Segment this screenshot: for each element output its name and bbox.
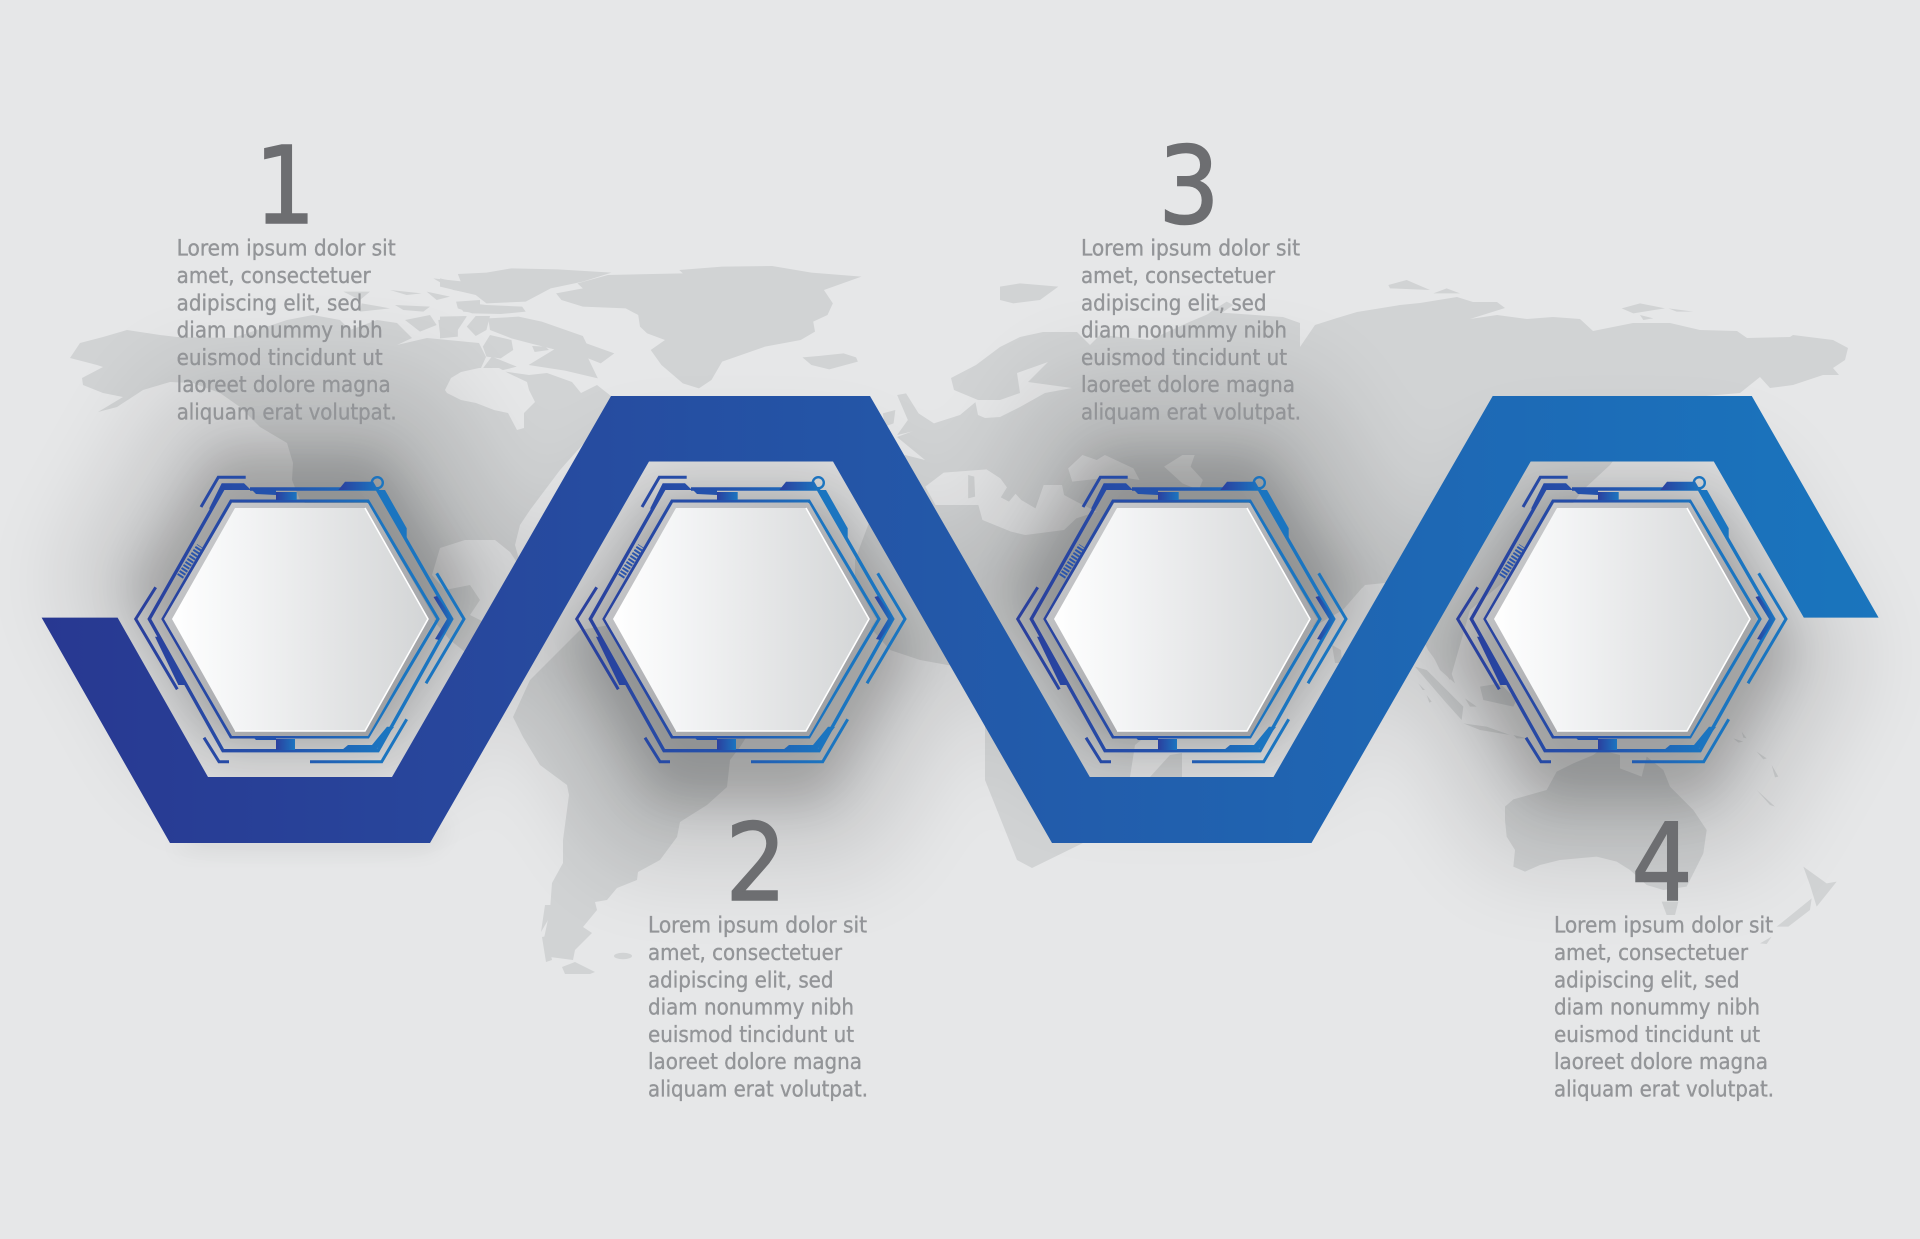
number 4: 4 — [1631, 802, 1693, 926]
step 3 text — [1081, 125, 1301, 426]
body text 4: amet, consectetuer — [1554, 941, 1749, 966]
body text 3: euismod tincidunt ut — [1081, 346, 1287, 371]
body text 4: Lorem ipsum dolor sit — [1554, 914, 1773, 939]
white hexagon 3 — [1046, 503, 1317, 736]
number 2: 2 — [725, 802, 787, 926]
circuit frame 1 — [136, 477, 464, 762]
body text 3 — [1081, 237, 1301, 426]
body text 1: aliquam erat volutpat. — [177, 400, 397, 426]
step 4 text — [1554, 802, 1774, 1102]
map: polar islands — [1000, 280, 1460, 325]
body text 1: euismod tincidunt ut — [177, 346, 383, 371]
body text 1: Lorem ipsum dolor sit — [177, 237, 396, 262]
body text 1: adipiscing elit, sed — [177, 291, 362, 316]
body text 4: adipiscing elit, sed — [1554, 968, 1740, 993]
body text 2: laoreet dolore magna — [648, 1050, 862, 1075]
body text 4 — [1554, 914, 1774, 1102]
body text 1: laoreet dolore magna — [177, 373, 391, 398]
body text 4: euismod tincidunt ut — [1554, 1023, 1760, 1048]
map: south america — [513, 620, 770, 960]
white hexagon 2 — [605, 503, 876, 736]
ribbon soft shadow — [170, 822, 452, 850]
number 3: 3 — [1158, 125, 1220, 249]
hexagon soft shadows — [60, 375, 1862, 865]
body text 1: diam nonummy nibh — [177, 319, 383, 344]
map: north america — [70, 315, 611, 680]
hexagon 2 — [577, 477, 905, 762]
body text 3: diam nonummy nibh — [1081, 319, 1287, 344]
number 1: 1 — [254, 125, 316, 249]
zigzag ribbon — [42, 396, 1879, 843]
body text 1: amet, consectetuer — [177, 264, 372, 289]
map: eurasia and africa — [855, 297, 1848, 868]
step 2 text — [648, 802, 868, 1102]
body text 1 — [177, 237, 397, 426]
world map — [70, 266, 1848, 974]
circuit frame 4 — [1458, 477, 1786, 762]
white hexagon 1 — [164, 503, 435, 736]
step 1 text — [177, 125, 397, 426]
body text 3: amet, consectetuer — [1081, 264, 1276, 289]
body text 3: laoreet dolore magna — [1081, 373, 1295, 398]
body text 4: aliquam erat volutpat. — [1554, 1078, 1774, 1102]
body text 2: euismod tincidunt ut — [648, 1023, 854, 1048]
map: greenland and iceland — [556, 266, 936, 435]
hexagon 4 — [1458, 477, 1786, 762]
body text 2: diam nonummy nibh — [648, 996, 854, 1021]
body text 2: aliquam erat volutpat. — [648, 1078, 868, 1102]
body text 4: diam nonummy nibh — [1554, 996, 1760, 1021]
body text 2: Lorem ipsum dolor sit — [648, 914, 867, 939]
body text 2: amet, consectetuer — [648, 941, 843, 966]
body text 2 — [648, 914, 868, 1102]
map: australia — [1415, 643, 1837, 944]
map: arctic islands — [440, 268, 614, 378]
white hexagon 4 — [1486, 503, 1757, 736]
body text 3: adipiscing elit, sed — [1081, 291, 1266, 316]
hexagon 1 — [136, 477, 464, 762]
circuit frame 2 — [577, 477, 905, 762]
body text 3: Lorem ipsum dolor sit — [1081, 237, 1300, 262]
map: italy and mediterranean islands — [968, 465, 1020, 502]
map: madagascar — [1150, 753, 1182, 777]
body text 2: adipiscing elit, sed — [648, 968, 834, 993]
circuit frame 3 — [1018, 477, 1346, 762]
map: seas — [445, 362, 1400, 670]
body text 3: aliquam erat volutpat. — [1081, 400, 1301, 426]
hexagon 3 — [1018, 477, 1346, 762]
body text 4: laoreet dolore magna — [1554, 1050, 1768, 1075]
